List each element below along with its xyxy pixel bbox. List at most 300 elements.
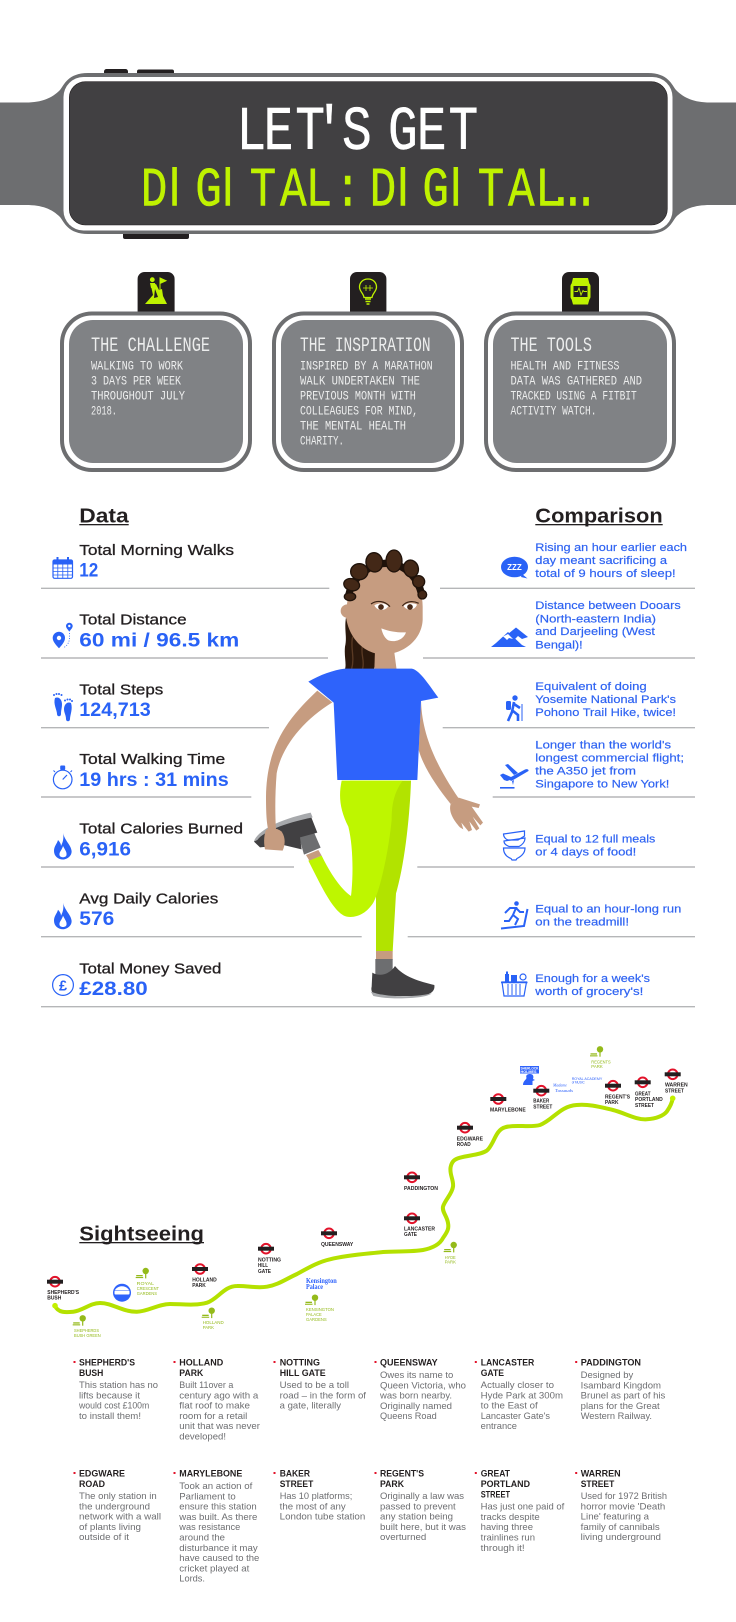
fact: baker street: STREET [280, 1479, 313, 1490]
fact: regent's park: REGENT'S [380, 1469, 425, 1480]
icon: treadmill runner [501, 901, 528, 928]
comparison: treadmill: Equal to an hour-long run [535, 904, 681, 916]
fact: edgware road: of plants living [79, 1522, 141, 1532]
comparison: groceries: worth of grocery's! [534, 986, 643, 998]
fact: queensway: Originally named [380, 1401, 452, 1411]
card heading: THE INSPIRATION [300, 335, 431, 358]
fact: holland park: developed! [179, 1432, 226, 1442]
fact: shepherd's bush: to install them! [79, 1411, 141, 1421]
sock: standing [375, 959, 393, 977]
icon: hiker [506, 695, 522, 721]
park: hyde park [444, 1242, 457, 1266]
landmark: kensington palace: Palace [306, 1283, 323, 1291]
comparison: sleep: total of 9 hours of sleep! [535, 568, 676, 580]
icon: pound coin [53, 975, 73, 995]
card heading: THE CHALLENGE [91, 335, 210, 358]
leg: standing [350, 781, 411, 952]
fact: warren street: family of cannibals [581, 1522, 660, 1532]
fact: warren street [575, 1469, 667, 1542]
fact: great portland street: through it! [481, 1543, 525, 1553]
stat: total steps: 124,713 [79, 699, 151, 721]
stat: total money saved: £28.80 [79, 978, 148, 1000]
landmark: madame tussauds [552, 1082, 573, 1093]
comparison: sleep: Rising an hour earlier each [535, 542, 687, 554]
icon: basket [501, 972, 528, 996]
station: shepherd's bush [47, 1277, 79, 1302]
route line [55, 1098, 673, 1312]
landmark: royal academy of music: ROYAL ACADEMY [572, 1077, 603, 1081]
landmark: kensington palace: Kensington [306, 1277, 337, 1285]
heading: data: Data [79, 505, 129, 528]
fact: baker street: the most of any [280, 1501, 346, 1511]
fact: lancaster gate: LANCASTER [481, 1358, 534, 1369]
fact: edgware road: ROAD [79, 1479, 105, 1490]
card body: WALKING TO WORK [91, 358, 183, 374]
park: royal crescent gardens: CRESCENT [137, 1286, 159, 1292]
head [341, 567, 423, 654]
fact: holland park: HOLLAND [179, 1358, 223, 1369]
fact: regent's park: PARK [380, 1479, 404, 1490]
stat: total calories burned [54, 822, 243, 860]
station: regent's park: REGENT'S [605, 1094, 630, 1100]
station: holland park: HOLLAND [192, 1277, 217, 1283]
fact: regent's park: passed to prevent [380, 1501, 456, 1511]
icon: mountains [491, 628, 528, 647]
stat: avg daily calories: 576 [79, 908, 115, 930]
station: great portland street: GREAT [635, 1091, 651, 1097]
comparison: groceries: Enough for a week's [535, 973, 651, 985]
station: warren street: WARREN [665, 1083, 688, 1089]
comparison: distance: and Darjeeling (West [535, 626, 655, 638]
stat: total steps [53, 683, 163, 721]
station: edgware road [457, 1123, 483, 1148]
fact: paddington: Brunel as part of his [581, 1391, 666, 1401]
heading: comparison: Comparison [535, 505, 663, 528]
card body [91, 358, 185, 418]
panel: the challenge [62, 272, 250, 470]
station: warren street: STREET [665, 1089, 685, 1095]
fact: warren street: Used for 1972 British [581, 1491, 667, 1501]
title line 2: D [141, 160, 167, 223]
fact: great portland street: STREET [481, 1489, 510, 1500]
fact: paddington: PADDINGTON [581, 1358, 641, 1369]
park: regents park: PARK [591, 1064, 603, 1070]
fact: baker street: London tube station [280, 1512, 365, 1522]
title line 2: I [222, 156, 234, 218]
stat: total money saved: Total Money Saved [79, 961, 221, 977]
card body: THROUGHOUT JULY [91, 388, 185, 404]
station: regent's park [605, 1081, 630, 1106]
title line 2: G [195, 160, 222, 223]
fact: queensway: Owes its name to [380, 1370, 453, 1380]
station: notting hill gate [258, 1244, 281, 1275]
fact: holland park: flat roof to make [179, 1401, 250, 1411]
comparison: treadmill: on the treadmill! [535, 916, 629, 928]
stat: total calories burned: Total Calories Burned [79, 822, 243, 838]
fact: notting hill gate: road – in the form of [280, 1390, 366, 1400]
shoe: standing [371, 966, 434, 998]
landmark: royal academy of music [572, 1077, 603, 1084]
fact: regent's park: overturned [380, 1532, 426, 1542]
card body: DATA WAS GATHERED AND [510, 374, 642, 388]
park: hyde park: PARK [445, 1260, 457, 1266]
icon: footprints [53, 693, 73, 721]
stat: total distance [53, 613, 239, 651]
card body: INSPIRED BY A MARATHON [300, 358, 433, 374]
stat: total calories burned: 6,916 [79, 838, 131, 860]
title line 1: LET'S GET [236, 97, 478, 168]
card body: HEALTH AND FITNESS [510, 358, 620, 374]
fact: paddington [575, 1358, 666, 1421]
fact: holland park [174, 1358, 260, 1442]
landmark: kensington palace [306, 1277, 337, 1291]
fact: marylebone: ensure this station [179, 1502, 257, 1512]
fact: marylebone: was built. As there [178, 1512, 257, 1522]
station: marylebone: MARYLEBONE [490, 1107, 526, 1113]
station: notting hill gate: NOTTING [258, 1257, 281, 1263]
stat: total walking time: 19 hrs : 31 mins [79, 769, 229, 791]
illustration: woman stretching [254, 550, 483, 998]
panel: data [53, 505, 243, 1000]
fact: shepherd's bush: would cost £100m [78, 1401, 150, 1411]
stat: total steps: Total Steps [79, 683, 163, 699]
icon: zzz bubble [501, 557, 528, 578]
stat: total walking time: Total Walking Time [79, 752, 225, 768]
station: baker street [533, 1086, 553, 1111]
fact: regent's park: any station being [380, 1512, 453, 1522]
fact: queensway: Queen Victoria, who [380, 1380, 466, 1390]
fact: lancaster gate: Hyde Park at 300m [481, 1390, 563, 1400]
fact: great portland street [475, 1469, 565, 1553]
station: paddington: PADDINGTON [404, 1186, 438, 1192]
card fill [493, 320, 667, 463]
fact: notting hill gate: Used to be a toll [280, 1380, 349, 1390]
card body: PREVIOUS MONTH WITH [300, 388, 416, 404]
panel: the inspiration [274, 272, 462, 470]
comparison: hike [506, 681, 677, 721]
comparison: distance: Distance between Dooars [535, 600, 681, 612]
title line 2: TAL... [478, 160, 599, 223]
comparison: flight: longest commercial flight; [535, 753, 684, 765]
station: great portland street: STREET [635, 1103, 655, 1109]
fact: holland park: Built 11over a [179, 1380, 234, 1390]
park: shepherds bush green: BUSH GREEN [74, 1333, 101, 1339]
fact: holland park: room for a retail [179, 1411, 247, 1421]
landmark: shepherd's bush empire [113, 1284, 131, 1302]
station: queensway: QUEENSWAY [321, 1242, 354, 1248]
station: shepherd's bush: BUSH [47, 1296, 61, 1302]
card body: CHARITY. [300, 434, 344, 448]
card body: TRACKED USING A FITBIT [510, 388, 637, 404]
icon: climber tab [138, 272, 175, 312]
fact: lancaster gate: entrance [481, 1421, 517, 1431]
icon: bowls [504, 831, 525, 860]
title line 2: TAL [250, 160, 332, 223]
station: lancaster gate: LANCASTER [404, 1227, 435, 1233]
fact: marylebone: Lords. [179, 1574, 205, 1584]
stat: avg daily calories: Avg Daily Calories [79, 892, 218, 908]
heading: sightseeing: Sightseeing [79, 1223, 204, 1246]
smile [381, 628, 406, 641]
fact: lancaster gate: to the East of [481, 1401, 538, 1411]
card body: ACTIVITY WATCH. [510, 404, 596, 418]
fact: warren street: WARREN [581, 1469, 621, 1480]
comparison: flight [500, 740, 684, 790]
fact: queensway: QUEENSWAY [380, 1358, 438, 1369]
panel: the tools [486, 272, 674, 470]
fact: marylebone: cricket played at [179, 1563, 250, 1573]
route end [670, 1096, 676, 1101]
fact: lancaster gate: Lancaster Gate's [481, 1411, 550, 1421]
park: royal crescent gardens: GARDENS [137, 1291, 157, 1297]
card body: 2018. [91, 404, 117, 418]
icon: map pins [53, 623, 73, 648]
station: edgware road: EDGWARE [457, 1136, 483, 1142]
title line 2: I [397, 156, 409, 218]
ankle: bent [306, 850, 322, 861]
card heading: THE TOOLS [510, 335, 592, 358]
stat: total morning walks: 12 [79, 560, 98, 582]
fact: marylebone: Took an action of [179, 1481, 253, 1491]
fact: marylebone: disturbance it may [179, 1543, 258, 1553]
fact: great portland street: Has just one paid of [481, 1502, 565, 1512]
station: paddington [404, 1172, 438, 1192]
fact: lancaster gate: Actually closer to [481, 1380, 554, 1390]
fact: shepherd's bush: This station has no [79, 1380, 158, 1390]
park: regents park [590, 1046, 611, 1070]
park: kensington palace gardens: PALACE [306, 1312, 322, 1318]
tube map [47, 1046, 688, 1339]
card fill [281, 320, 455, 463]
station: edgware road: ROAD [457, 1142, 471, 1148]
fact: marylebone: have caused to the [179, 1553, 259, 1563]
station: baker street: BAKER [533, 1099, 549, 1105]
station: marylebone [490, 1094, 526, 1113]
fact: paddington: Designed by [581, 1370, 634, 1380]
landmark: sherlock holmes: SHERLOCK [520, 1066, 539, 1070]
comparison: distance [491, 600, 681, 651]
neck [374, 650, 397, 670]
fact: shepherd's bush: lifts because it [79, 1390, 140, 1400]
park: holland park [202, 1308, 224, 1331]
fact: great portland street: tracks despite [481, 1512, 540, 1522]
station: notting hill gate: HILL [258, 1263, 269, 1269]
comparison: distance: (North-eastern India) [535, 613, 656, 625]
fact: regent's park [374, 1469, 466, 1542]
icon: smartwatch tab [562, 272, 599, 312]
landmark: sherlock holmes [520, 1066, 539, 1085]
arm: left [266, 691, 332, 830]
fact: edgware road: network with a wall [79, 1512, 161, 1522]
watch strap and body [0, 73, 736, 234]
eyes [371, 601, 419, 610]
landmark: royal academy of music: of MUSIC [572, 1080, 585, 1084]
route start [52, 1303, 58, 1308]
watch header [0, 69, 736, 239]
park: hyde park: HYDE [445, 1255, 456, 1261]
watch buttons [104, 69, 189, 239]
title line 2: D [370, 160, 396, 223]
fact: queensway: Queens Road [380, 1411, 437, 1421]
station: warren street [665, 1070, 688, 1095]
stat: total money saved [53, 961, 221, 1000]
park: kensington palace gardens: GARDENS [306, 1317, 327, 1323]
comparison: distance: Bengal)! [535, 639, 583, 651]
fact: queensway [374, 1358, 466, 1421]
fact: baker street: Has 10 platforms; [280, 1491, 352, 1501]
fact: great portland street: trainlines run [481, 1532, 535, 1542]
comparison: food: Equal to 12 full meals [535, 834, 656, 846]
card fill [69, 320, 243, 463]
card body: WALK UNDERTAKEN THE [300, 374, 420, 388]
landmark: madame tussauds: Tussauds [555, 1088, 573, 1093]
park: royal crescent gardens: ROYAL [137, 1281, 154, 1287]
fact: marylebone: Parliament to [179, 1491, 236, 1501]
fact: lancaster gate: GATE [481, 1368, 505, 1379]
fact: queensway: was born nearby. [379, 1391, 452, 1401]
icon: stopwatch [53, 766, 72, 789]
fact: lancaster gate [475, 1358, 563, 1431]
fact: shepherd's bush [74, 1358, 158, 1421]
fact: edgware road: the underground [79, 1501, 150, 1511]
icon: light bulb tab [350, 272, 386, 312]
fact: marylebone: MARYLEBONE [179, 1469, 243, 1480]
title line 2: G [422, 160, 449, 223]
park: royal crescent gardens [136, 1268, 159, 1297]
fact: great portland street: GREAT [481, 1469, 510, 1480]
comparison: sleep: day meant sacrificing a [535, 555, 668, 567]
comparison: flight: Longer than the world's [535, 740, 672, 752]
hair [342, 550, 427, 601]
comparison: food: or 4 days of food! [535, 846, 636, 858]
watch screen [69, 82, 667, 225]
title line 2: I [450, 156, 462, 218]
fact: holland park: PARK [179, 1368, 203, 1379]
station: lancaster gate: GATE [404, 1232, 417, 1238]
fact: shepherd's bush: SHEPHERD'S [79, 1358, 136, 1369]
hand: left [264, 828, 285, 851]
icon: plane [500, 764, 529, 789]
park: shepherds bush green: SHEPHERDS [74, 1328, 99, 1334]
card body: 3 DAYS PER WEEK [91, 374, 181, 388]
comparison: food [504, 831, 656, 860]
park: shepherds bush green [73, 1315, 101, 1339]
station: baker street: STREET [533, 1105, 553, 1111]
card body [300, 358, 433, 448]
stat: total distance: 60 mi / 96.5 km [79, 629, 239, 651]
comparison: hike: Equivalent of doing [535, 681, 647, 693]
park: holland park: PARK [203, 1325, 215, 1331]
fact: warren street: living underground [581, 1532, 661, 1542]
ankle: standing [376, 951, 393, 960]
comparison: flight: the A350 jet from [535, 765, 636, 777]
station: regent's park: PARK [605, 1100, 619, 1106]
sock: bent [298, 829, 321, 855]
stat: avg daily calories [54, 892, 218, 930]
shirt [308, 669, 438, 780]
fact: edgware road: EDGWARE [79, 1469, 126, 1480]
title line 2: : [334, 160, 361, 223]
fact: holland park: century ago with a [179, 1390, 259, 1400]
comparison: sleep [501, 542, 687, 580]
fact: paddington: plans for the Great [581, 1401, 660, 1411]
fact: warren street: Line' featuring a [581, 1512, 650, 1522]
fact: notting hill gate: NOTTING [280, 1358, 320, 1369]
comparison: hike: Pohono Trail Hike, twice! [535, 707, 676, 719]
stat: total distance: Total Distance [79, 613, 187, 629]
braids [345, 617, 377, 669]
station: queensway [321, 1228, 354, 1248]
park: kensington palace gardens [305, 1294, 334, 1323]
park: regents park: REGENTS [591, 1060, 611, 1066]
icon: flame [54, 833, 72, 860]
title line 2: I [168, 156, 181, 218]
landmark: sherlock holmes: HOLMES [520, 1070, 536, 1074]
fact: notting hill gate [274, 1358, 366, 1411]
icon: zzz bubble: ZZZ [507, 563, 522, 572]
stat: total morning walks: Total Morning Walks [79, 543, 234, 559]
card body: THE MENTAL HEALTH [300, 418, 406, 434]
fact: great portland street: PORTLAND [481, 1479, 530, 1490]
card frame [274, 314, 462, 470]
fact: notting hill gate: HILL GATE [280, 1368, 326, 1379]
fact: paddington: Isambard Kingdom [581, 1380, 661, 1390]
stat: total walking time [53, 752, 229, 791]
card frame [62, 314, 250, 470]
fact: great portland street: having three [481, 1522, 533, 1532]
station: notting hill gate: GATE [258, 1269, 271, 1275]
fact: marylebone [174, 1469, 259, 1584]
shoe: bent [254, 813, 317, 849]
fact: baker street [274, 1469, 365, 1522]
hand: right [450, 798, 483, 832]
fact: shepherd's bush: BUSH [79, 1368, 103, 1379]
fact: regent's park: built here, but it was [380, 1522, 466, 1532]
arm: right [419, 700, 459, 804]
fact: baker street: BAKER [280, 1469, 310, 1480]
fact: edgware road [74, 1469, 161, 1542]
panel: comparison [491, 505, 687, 998]
fact: holland park: unit that was never [179, 1421, 260, 1431]
landmark: madame tussauds: Madame [552, 1082, 567, 1088]
station: holland park [192, 1264, 217, 1289]
park: kensington palace gardens: KENSINGTON [306, 1307, 334, 1313]
comparison: treadmill [501, 901, 681, 928]
station: great portland street [635, 1078, 663, 1109]
fact: marylebone: around the [179, 1532, 225, 1542]
fact: marylebone: was resistance [178, 1522, 240, 1532]
fact: regent's park: Originally a law was [380, 1491, 464, 1501]
park: holland park: HOLLAND [203, 1320, 224, 1326]
station facts [74, 1358, 667, 1584]
comparison: flight: Singapore to New York! [535, 778, 669, 790]
comparison: hike: Yosemite National Park's [535, 694, 677, 706]
station: shepherd's bush: SHEPHERD'S [47, 1290, 79, 1296]
icon: pound coin: £ [59, 978, 67, 994]
icon: calendar [53, 557, 72, 578]
station: great portland street: PORTLAND [635, 1097, 663, 1103]
stat: total morning walks [53, 543, 234, 582]
fact: paddington: Western Railway. [581, 1411, 652, 1421]
fact: warren street: STREET [581, 1479, 614, 1490]
comparison: groceries [501, 972, 651, 998]
icon: flame [54, 903, 72, 929]
watch bezel [64, 77, 672, 230]
fact: notting hill gate: a gate, literally [280, 1401, 341, 1411]
station: holland park: PARK [192, 1283, 206, 1289]
station: lancaster gate [404, 1214, 435, 1238]
fact: edgware road: The only station in [79, 1491, 157, 1501]
